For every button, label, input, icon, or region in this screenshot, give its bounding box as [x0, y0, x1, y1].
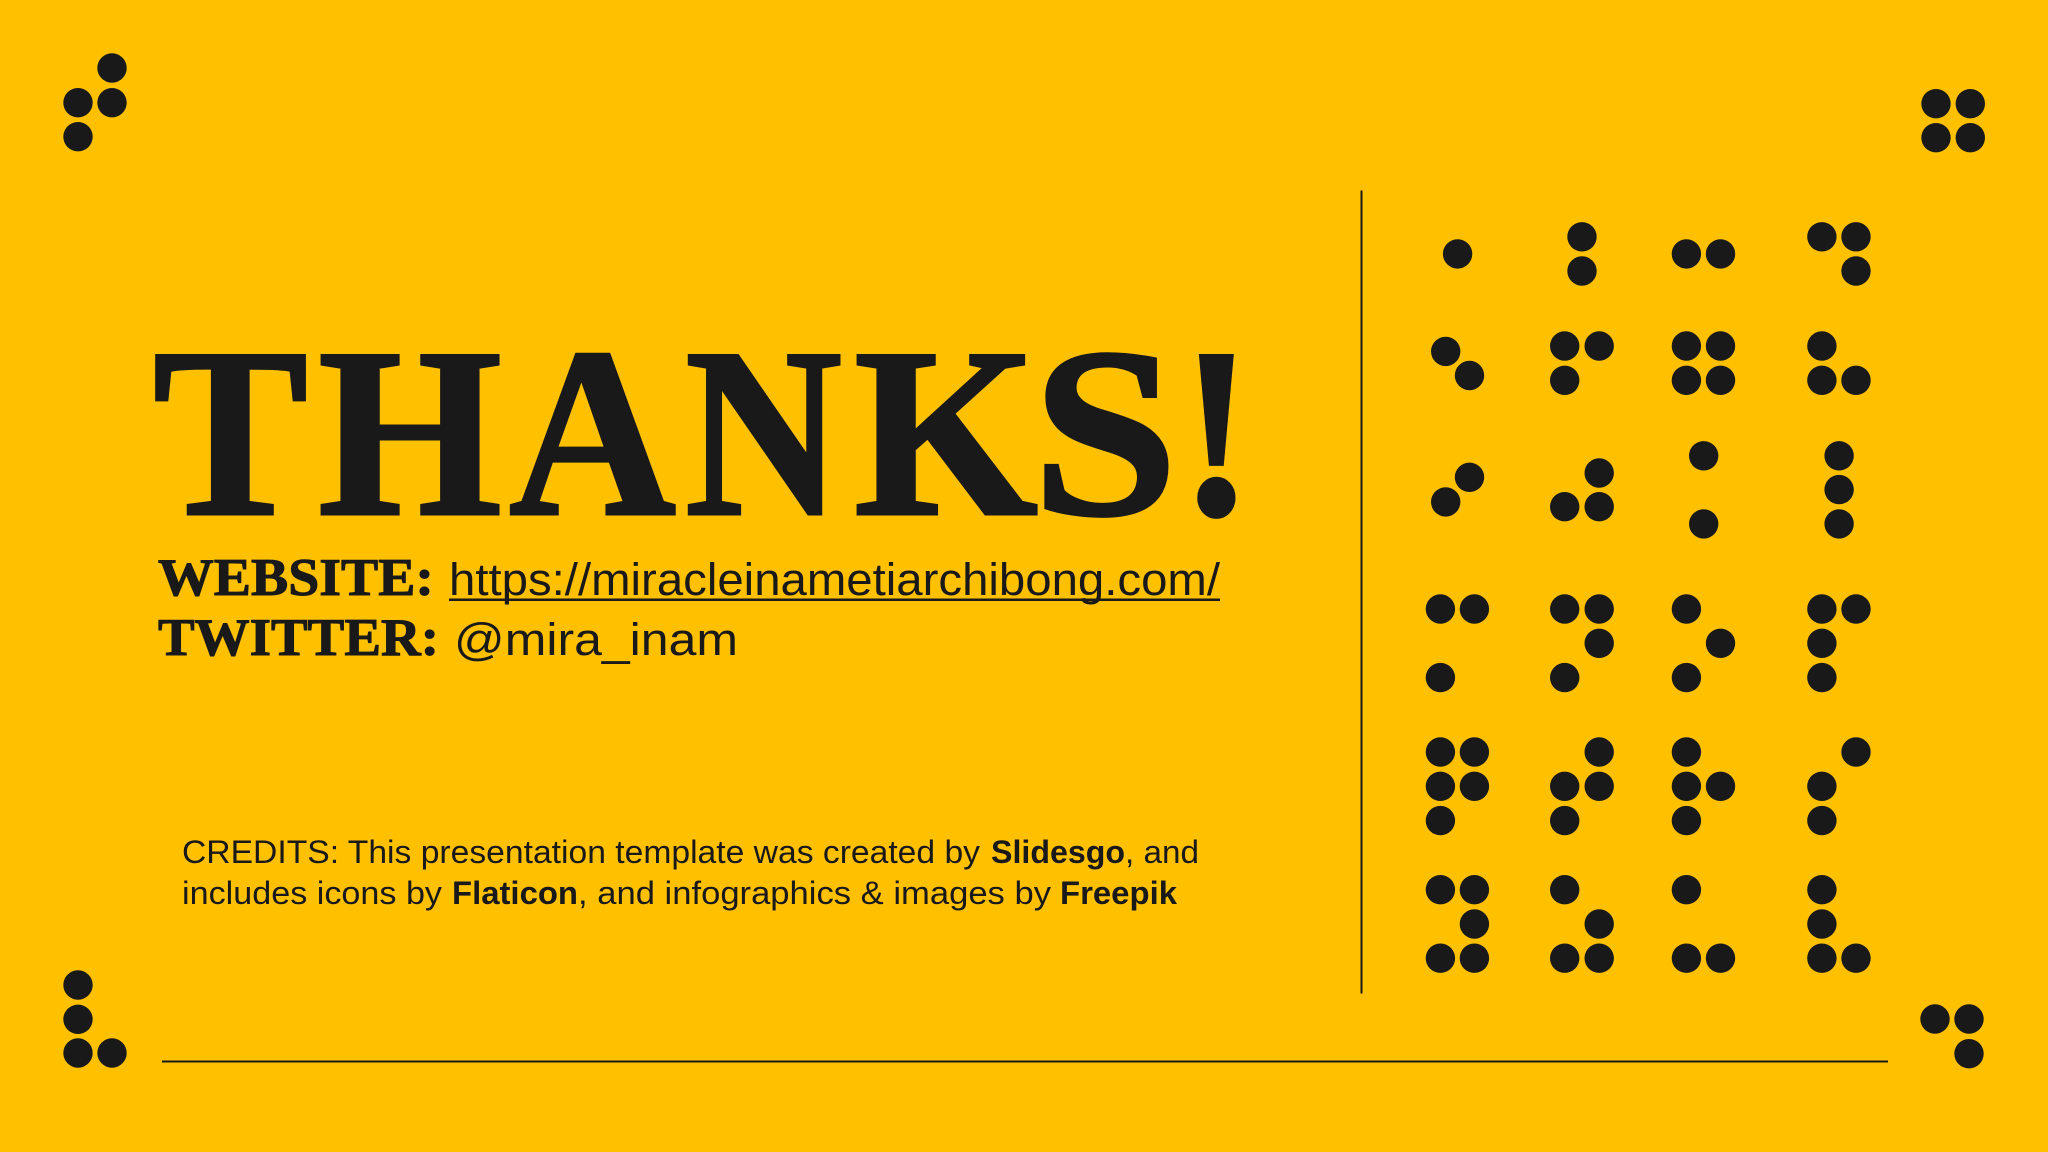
- braille cell r4c2: [1550, 594, 1614, 692]
- braille cell r4c3: [1672, 594, 1735, 692]
- braille cell r2c3: [1672, 331, 1735, 395]
- braille cell r5c3: [1672, 737, 1735, 835]
- braille cell r4c4: [1807, 594, 1871, 692]
- twitter handle: @mira_inam: [454, 614, 738, 665]
- braille cell r5c4: [1807, 737, 1871, 835]
- title: H: [318, 299, 502, 567]
- icon: braille corner bottom right: [1920, 1004, 1984, 1068]
- braille cell r5c1: [1426, 737, 1489, 835]
- credits text: , and: [1125, 834, 1199, 870]
- braille cell r1c4: [1807, 222, 1871, 286]
- credits text: Flaticon: [452, 875, 578, 911]
- braille cell r5c2: [1550, 737, 1614, 835]
- braille cell r2c2: [1550, 331, 1614, 395]
- braille cell r2c4: [1807, 331, 1871, 395]
- braille cell r1c1: [1443, 239, 1472, 269]
- braille cell r3c2: [1550, 458, 1614, 521]
- credits text: Freepik: [1060, 875, 1177, 911]
- braille cell r4c1: [1426, 594, 1489, 692]
- website label: WEBSITE:: [158, 549, 434, 607]
- credits text: , and infographics & images by: [578, 875, 1051, 911]
- braille cell r3c4: [1824, 441, 1854, 539]
- icon: braille corner bottom left: [63, 970, 127, 1068]
- credits text: [182, 834, 1199, 911]
- braille cell r1c2: [1567, 222, 1597, 286]
- braille cell r3c1: [1431, 463, 1484, 517]
- credits text: Slidesgo: [991, 834, 1125, 870]
- icon: braille corner top left: [63, 53, 127, 151]
- braille cell r2c1: [1431, 337, 1484, 390]
- title: T: [153, 299, 308, 567]
- braille cell r6c4: [1807, 875, 1871, 973]
- contact details: [158, 549, 1221, 667]
- twitter label: TWITTER:: [158, 609, 439, 667]
- website link: https://miracleinametiarchibong.com/: [449, 554, 1221, 605]
- credits text: CREDITS: This presentation template was created by: [182, 834, 980, 870]
- braille cell r6c3: [1672, 875, 1735, 973]
- title: N: [685, 299, 842, 567]
- braille cell r1c3: [1672, 239, 1735, 269]
- title: A: [509, 299, 676, 567]
- braille cell r6c2: [1550, 875, 1614, 973]
- braille cell r6c1: [1426, 875, 1489, 973]
- title: S: [1032, 299, 1178, 567]
- credits text: includes icons by: [182, 875, 442, 911]
- icon: braille corner top right: [1921, 89, 1985, 152]
- braille grid: [1426, 222, 1871, 973]
- title: K: [854, 299, 1038, 567]
- braille cell r3c3: [1689, 441, 1718, 539]
- title: !: [1180, 299, 1253, 567]
